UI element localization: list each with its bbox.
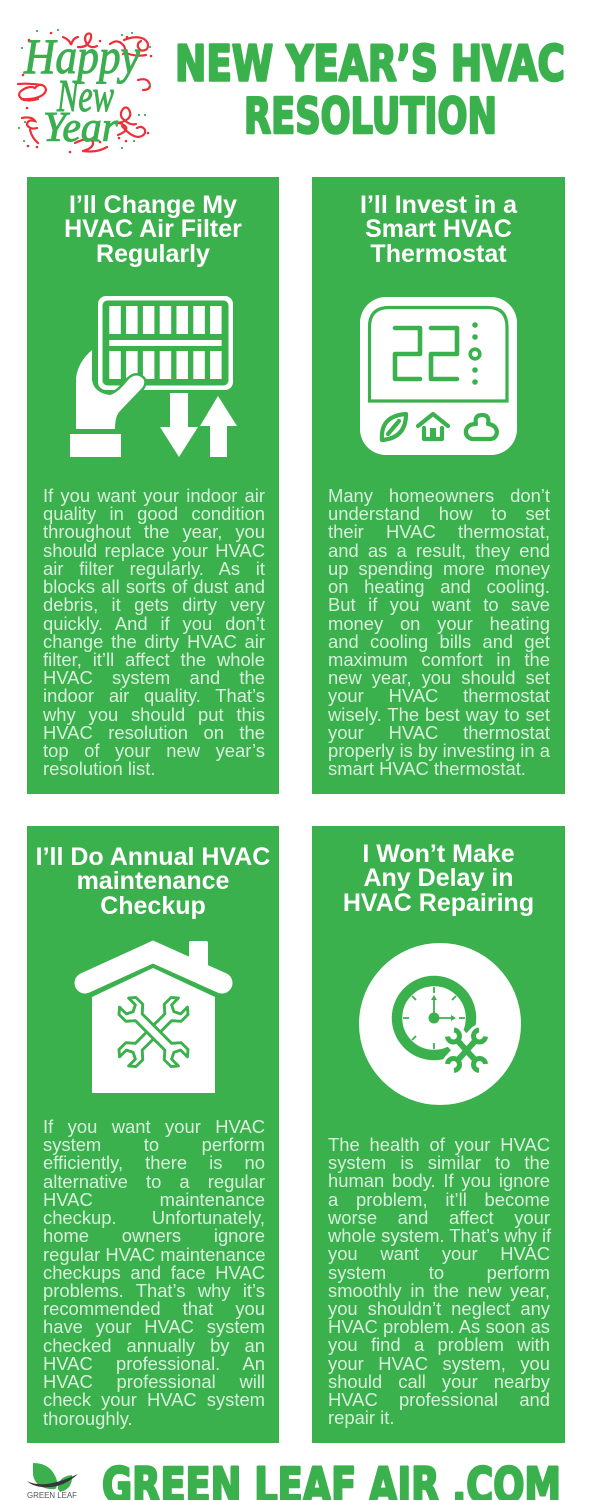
body text: annual maintenance: system to perform bbox=[43, 1134, 265, 1155]
body text: annual maintenance: HVAC professional will bbox=[43, 1371, 265, 1392]
body text: change air filter: quickly. And if you don’t bbox=[43, 613, 265, 634]
body text: no repair delay: HVAC problem. As soon as bbox=[328, 1316, 550, 1337]
body text: change air filter: HVAC resolution on the bbox=[43, 722, 265, 743]
panel: smart thermostat bbox=[312, 177, 565, 794]
body text: smart thermostat: understand how to set bbox=[328, 503, 550, 524]
heading: annual maintenance: I’ll Do Annual HVAC bbox=[36, 843, 270, 871]
body text: no repair delay: should call your nearby bbox=[328, 1371, 550, 1392]
body text: annual maintenance: HVAC professional. An bbox=[43, 1353, 265, 1374]
body text: no repair delay: your HVAC system, you bbox=[328, 1353, 550, 1374]
body text: no repair delay: worse and affect your bbox=[328, 1207, 550, 1228]
icon: happy new year lettering bbox=[16, 28, 152, 154]
heading: change air filter: Regularly bbox=[96, 240, 210, 268]
body text: change air filter: should replace your HVAC bbox=[43, 540, 265, 561]
body text: smart thermostat: Many homeowners don’t bbox=[328, 485, 550, 506]
body text: annual maintenance: If you want your HVAC bbox=[43, 1116, 265, 1137]
heading: change air filter bbox=[64, 191, 242, 268]
body text: smart thermostat: your HVAC thermostat bbox=[328, 722, 550, 743]
icon: house with crossed wrenches bbox=[74, 940, 232, 1093]
body text: change air filter: air filter regularly. As it bbox=[43, 558, 265, 579]
body text: change air filter bbox=[43, 485, 265, 779]
body text: smart thermostat: money on your heating bbox=[328, 613, 550, 634]
body text: smart thermostat bbox=[328, 485, 550, 779]
body text: no repair delay: repair it. bbox=[328, 1407, 394, 1428]
body text: smart thermostat: smart HVAC thermostat. bbox=[328, 758, 526, 779]
body text: change air filter: indoor air quality. That’s bbox=[43, 685, 265, 706]
body text: no repair delay: whole system. That’s why if bbox=[328, 1225, 551, 1246]
icon: clock with wrenches in circle bbox=[359, 943, 521, 1105]
heading: smart thermostat: I’ll Invest in a bbox=[360, 191, 517, 219]
panel: no repair delay bbox=[312, 826, 565, 1443]
body text: annual maintenance: checked annually by an bbox=[43, 1335, 265, 1356]
body text: annual maintenance: alternative to a regular bbox=[43, 1171, 265, 1192]
heading: change air filter: HVAC Air Filter bbox=[64, 215, 242, 243]
body text: annual maintenance bbox=[43, 1116, 266, 1429]
body text: annual maintenance: check your HVAC system bbox=[43, 1389, 265, 1410]
body text: no repair delay: HVAC professional and bbox=[328, 1389, 550, 1410]
body text: smart thermostat: up spending more money bbox=[328, 558, 550, 579]
heading: annual maintenance: Checkup bbox=[100, 892, 206, 920]
body text: change air filter: why you should put this bbox=[43, 704, 265, 725]
icon: hand holding air filter with arrows bbox=[70, 296, 237, 457]
body text: no repair delay: you find a problem with bbox=[328, 1334, 550, 1355]
heading: annual maintenance bbox=[36, 843, 270, 920]
body text: annual maintenance: HVAC maintenance bbox=[43, 1189, 265, 1210]
body text: change air filter: blocks all sorts of dust and bbox=[43, 576, 265, 597]
logo: green leaf: GREEN LEAF bbox=[27, 1491, 77, 1500]
body text: change air filter: resolution list. bbox=[43, 758, 155, 779]
body text: change air filter: debris, it gets dirty very bbox=[43, 594, 265, 615]
body text: change air filter: If you want your indoor air bbox=[43, 485, 265, 506]
heading: smart thermostat bbox=[360, 191, 518, 268]
heading: change air filter: I’ll Change My bbox=[69, 191, 237, 219]
body text: no repair delay: system to perform bbox=[328, 1262, 550, 1283]
title bbox=[175, 36, 565, 142]
logo: green leaf bbox=[27, 1463, 78, 1500]
body text: change air filter: filter, it’ll affect the whole bbox=[43, 649, 265, 670]
heading: smart thermostat: Thermostat bbox=[370, 240, 507, 268]
body text: smart thermostat: new year, you should set bbox=[328, 667, 550, 688]
body text: smart thermostat: their HVAC thermostat, bbox=[328, 521, 550, 542]
body text: smart thermostat: and cooling bills and get bbox=[328, 631, 550, 652]
body text: no repair delay: you shouldn’t neglect any bbox=[328, 1298, 550, 1319]
body text: annual maintenance: checkup. Unfortunately, bbox=[43, 1207, 265, 1228]
body text: annual maintenance: have your HVAC system bbox=[43, 1316, 265, 1337]
icon: thermostat bbox=[360, 297, 517, 455]
body text: annual maintenance: problems. That’s why it’s bbox=[43, 1280, 265, 1301]
body text: no repair delay bbox=[328, 1134, 552, 1428]
heading: no repair delay: HVAC Repairing bbox=[343, 889, 534, 917]
body text: annual maintenance: checkups and face HVAC bbox=[43, 1262, 265, 1283]
body text: annual maintenance: home owners ignore bbox=[43, 1225, 265, 1246]
lettering text: New bbox=[56, 70, 114, 121]
heading: no repair delay bbox=[343, 840, 534, 917]
body text: smart thermostat: and as a result, they end bbox=[328, 540, 550, 561]
body text: smart thermostat: maximum comfort in the bbox=[328, 649, 550, 670]
body text: no repair delay: system is similar to the bbox=[328, 1152, 550, 1173]
heading: annual maintenance: maintenance bbox=[77, 867, 229, 895]
lettering text: Happy bbox=[23, 28, 141, 84]
body text: smart thermostat: But if you want to save bbox=[328, 594, 550, 615]
body text: smart thermostat: wisely. The best way to set bbox=[328, 704, 550, 725]
lettering text bbox=[23, 28, 141, 151]
panel: annual maintenance bbox=[27, 826, 279, 1443]
heading: smart thermostat: Smart HVAC bbox=[365, 215, 512, 243]
heading: no repair delay: I Won’t Make bbox=[362, 840, 515, 868]
body text: annual maintenance: recommended that you bbox=[43, 1298, 265, 1319]
heading: no repair delay: Any Delay in bbox=[363, 864, 514, 892]
body text: annual maintenance: efficiently, there is no bbox=[43, 1152, 265, 1173]
body text: change air filter: HVAC system and the bbox=[43, 667, 265, 688]
lettering text: Year bbox=[43, 105, 119, 151]
body text: smart thermostat: properly is by investing in a bbox=[328, 740, 550, 761]
body text: no repair delay: you want your HVAC bbox=[328, 1243, 550, 1264]
body text: change air filter: top of your new year’s bbox=[43, 740, 265, 761]
body text: change air filter: quality in good condition bbox=[43, 503, 265, 524]
body text: smart thermostat: on heating and cooling. bbox=[328, 576, 550, 597]
panel: change air filter bbox=[27, 177, 279, 794]
body text: annual maintenance: regular HVAC maintenance bbox=[43, 1244, 266, 1265]
body text: annual maintenance: thoroughly. bbox=[43, 1408, 133, 1428]
body text: change air filter: throughout the year, you bbox=[43, 521, 265, 542]
body text: smart thermostat: your HVAC thermostat bbox=[328, 685, 550, 706]
body text: no repair delay: a problem, it’ll become bbox=[328, 1189, 550, 1210]
body text: change air filter: change the dirty HVAC air bbox=[43, 631, 265, 652]
body text: no repair delay: The health of your HVAC bbox=[328, 1134, 550, 1155]
body text: no repair delay: human body. If you ignore bbox=[328, 1170, 550, 1191]
body text: no repair delay: smoothly in the new year, bbox=[328, 1280, 550, 1301]
